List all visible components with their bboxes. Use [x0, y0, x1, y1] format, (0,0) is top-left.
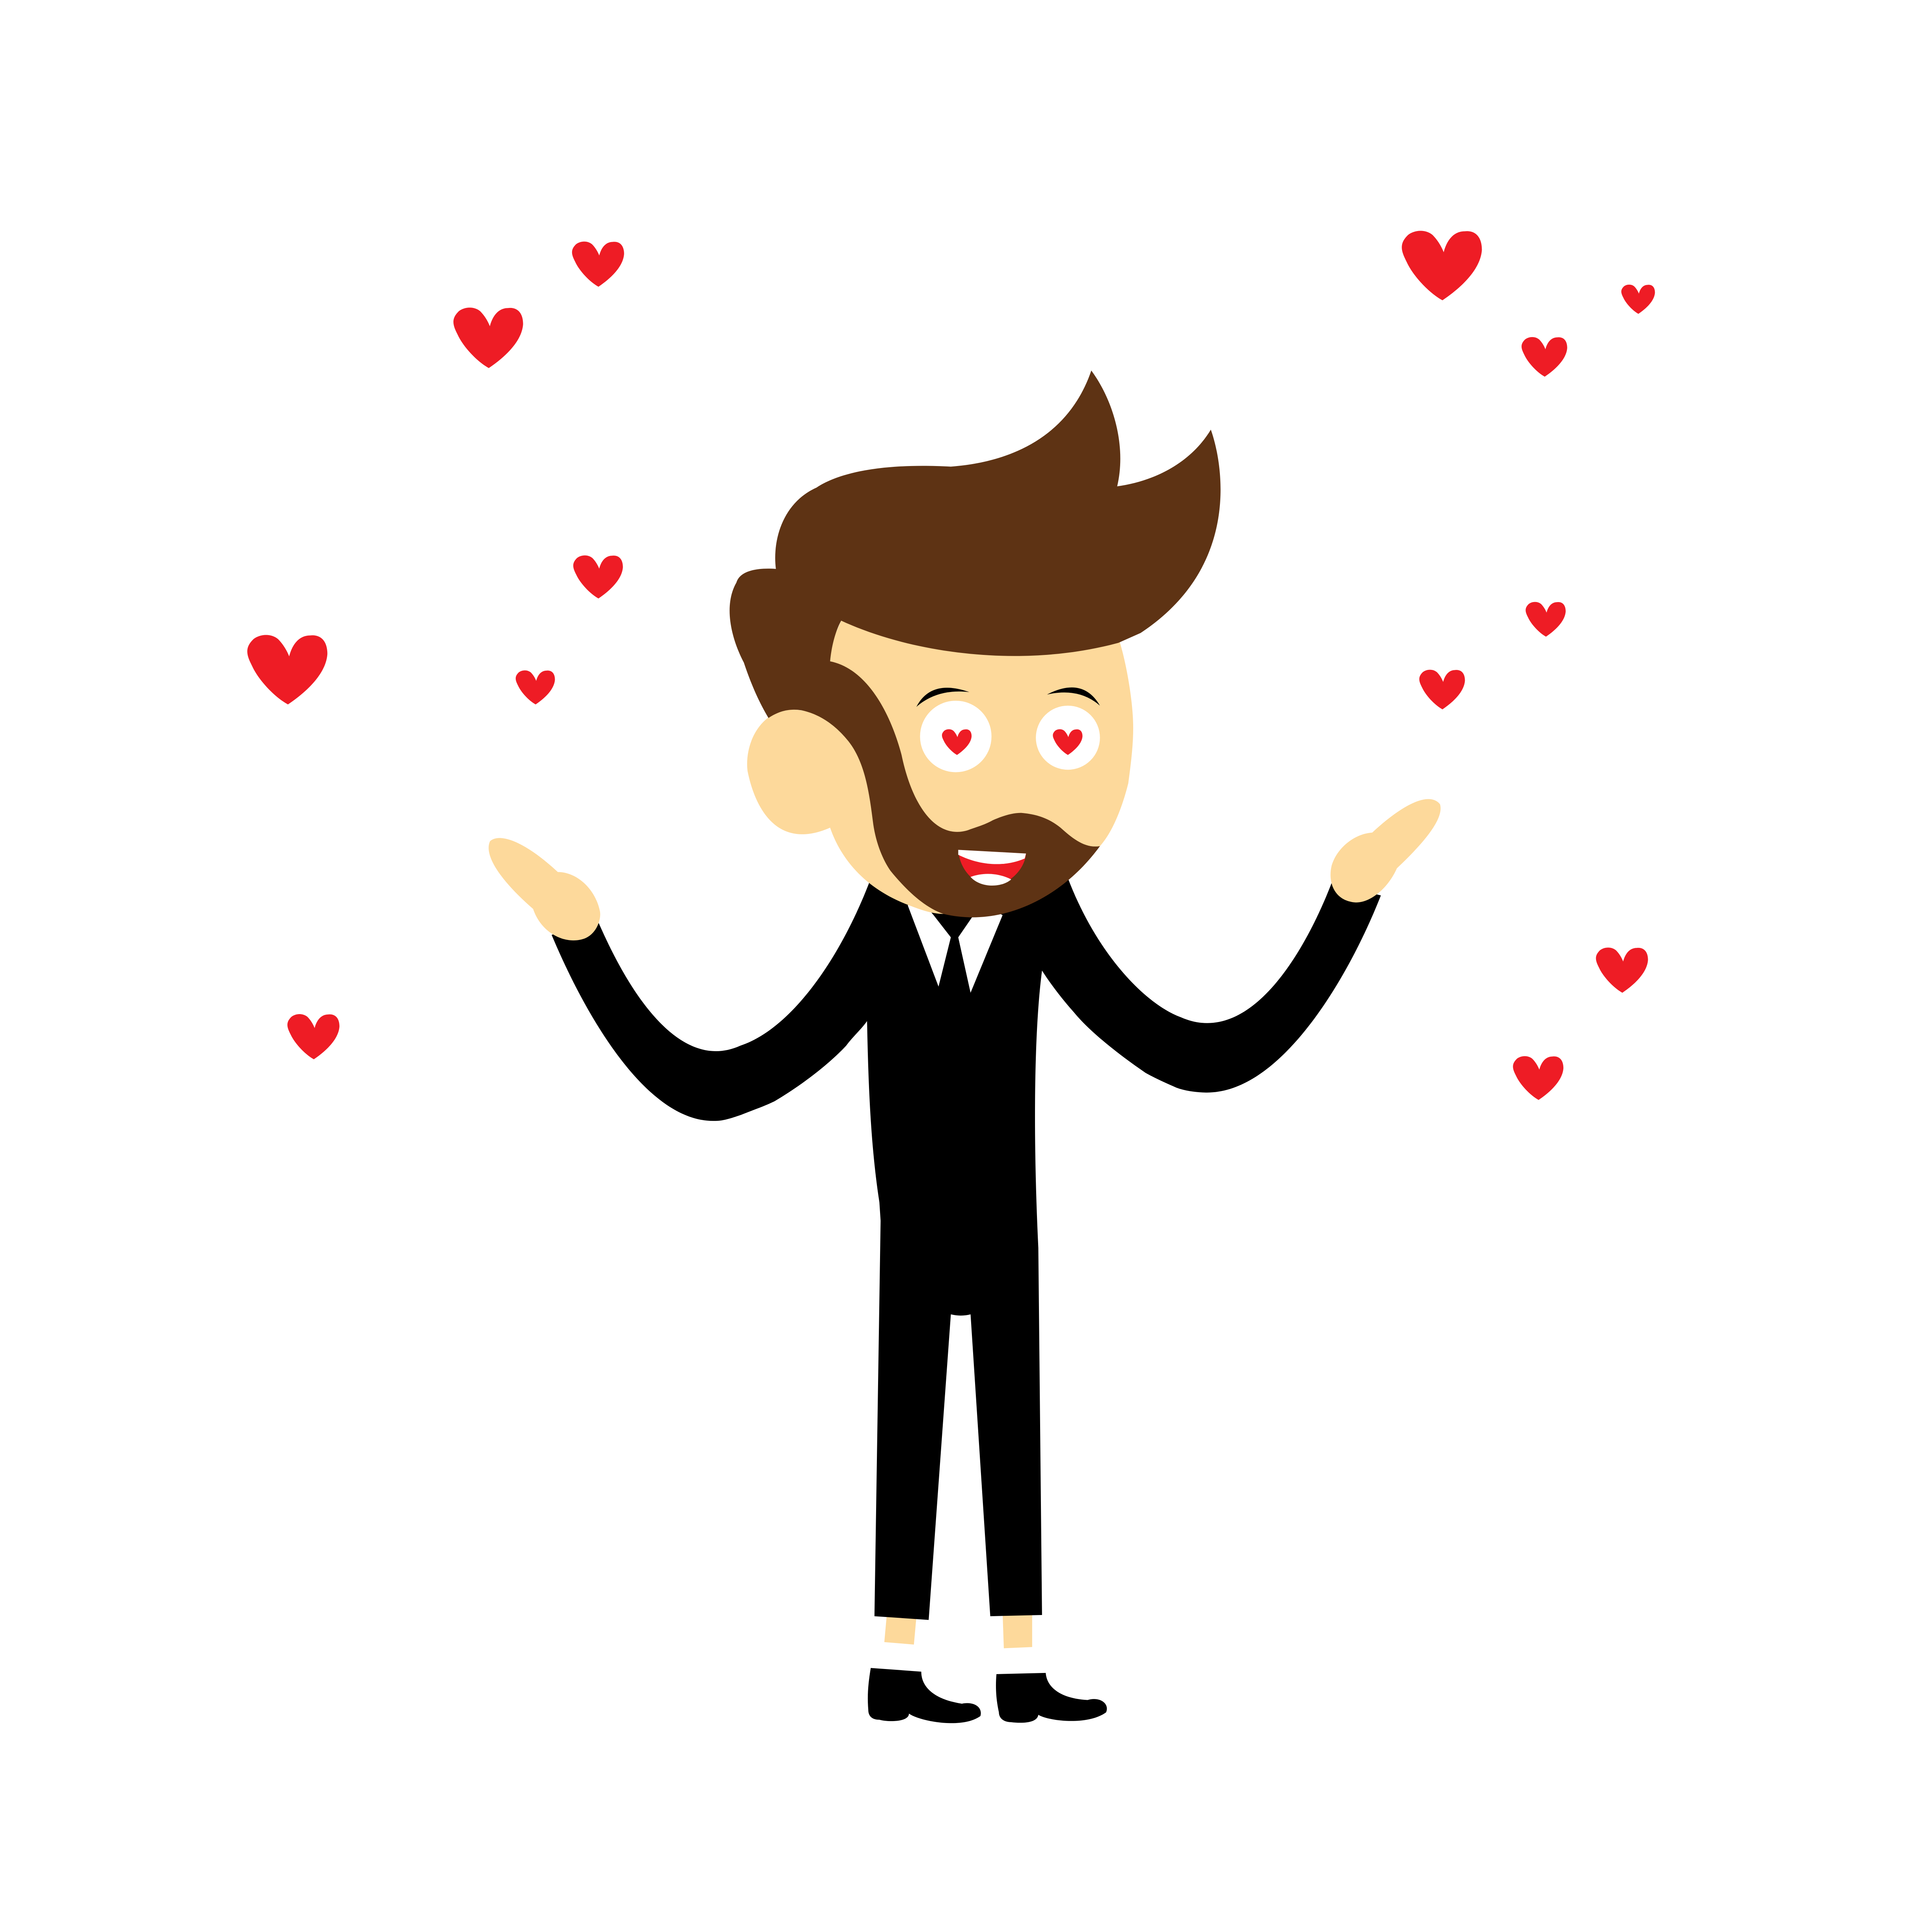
face skin and ear: [747, 621, 1133, 914]
heart: far left large: [247, 635, 327, 705]
heart: top left medium: [453, 308, 523, 368]
right ankle: [1003, 1613, 1032, 1648]
left ankle: [884, 1615, 916, 1645]
heart: left tiny: [516, 670, 555, 705]
shirt collar right: [958, 906, 1003, 993]
right eye: [1036, 706, 1100, 770]
heart: top right tiny: [1621, 285, 1655, 314]
left hand: [489, 838, 600, 940]
left eye: [920, 701, 992, 772]
heart: right of face: [1419, 670, 1465, 709]
heart: top left small: [572, 242, 624, 287]
mouth: [958, 850, 1026, 886]
right shoe: [996, 1673, 1107, 1723]
right hand: [1331, 799, 1441, 903]
left eyebrow: [916, 688, 969, 707]
heart: lower right: [1596, 947, 1648, 993]
heart: upper right small: [1522, 337, 1567, 377]
heart: bottom right: [1513, 1056, 1563, 1100]
heart: top right large: [1402, 231, 1482, 300]
black suit with arms and trousers: [552, 839, 1381, 1620]
shirt collar left: [908, 898, 951, 987]
heart: left middle: [573, 556, 623, 599]
left shoe: [868, 1668, 981, 1723]
heart: lower left: [287, 1014, 339, 1059]
heart: right middle: [1525, 602, 1566, 637]
hair and beard: [729, 371, 1221, 918]
right eyebrow: [1047, 688, 1100, 706]
